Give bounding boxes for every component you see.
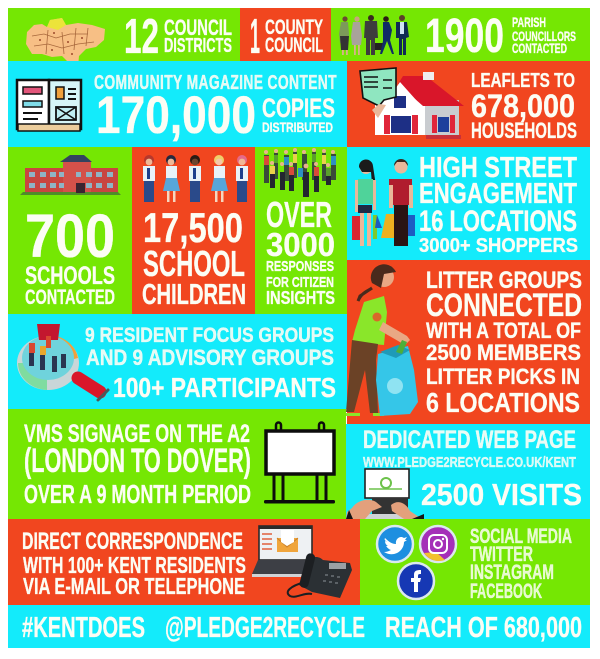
panel: high street (347, 147, 590, 260)
icon: two shoppers (352, 159, 415, 246)
panel: leaflets (347, 61, 590, 147)
label: parish councillors contacted: CONTACTED (512, 40, 567, 56)
text: VMS signage: VMS SIGNAGE ON THE A2 (24, 420, 250, 448)
text: over 3000 responses (266, 194, 335, 308)
panel: council districts (8, 8, 240, 67)
label: county council: COUNCIL (265, 34, 323, 57)
panel: litter groups (346, 260, 590, 424)
text: direct correspondence: VIA E-MAIL OR TELEPHONE (23, 573, 245, 599)
number: 12: 12 (124, 10, 159, 64)
panel: VMS signage (8, 409, 346, 519)
text: focus and advisory groups: 9 RESIDENT FOCUS GROUPS (85, 324, 334, 347)
text: over 3000 responses: INSIGHTS (266, 288, 335, 308)
panel: direct correspondence (8, 519, 360, 605)
panel: footer hashtags and reach (8, 605, 590, 648)
text: social media list: INSTAGRAM (470, 561, 554, 584)
icon: Kent map (26, 18, 105, 67)
text: over 3000 responses: OVER (266, 194, 332, 235)
panel: citizen insights (255, 147, 347, 314)
text: 17,500 school children: SCHOOL (143, 243, 245, 284)
label: copies distributed: COPIES (262, 93, 335, 123)
number: 2500 visits: 2500 VISITS (421, 477, 582, 512)
number: 700: 700 (25, 202, 115, 270)
panel: school children (132, 147, 255, 314)
icon: five school children (143, 155, 248, 202)
label: copies distributed: DISTRIBUTED (262, 119, 333, 135)
panel: schools (8, 147, 132, 314)
icon: woman litter picking (346, 264, 418, 416)
panel: focus groups (8, 314, 347, 409)
text: focus and advisory groups: 100+ PARTICIPANTS (113, 372, 336, 403)
icon: house with leaflet (360, 68, 464, 139)
label: council districts: DISTRICTS (164, 35, 232, 57)
text: direct correspondence: WITH 100+ KENT RESIDENTS (23, 552, 246, 578)
text: 17,500 school children: CHILDREN (142, 279, 246, 311)
text: VMS signage: (LONDON TO DOVER) (24, 442, 251, 480)
icon: facebook (398, 563, 434, 599)
label: county council (265, 16, 323, 57)
icon: crowd of people (264, 148, 336, 197)
text: social media list: TWITTER (470, 543, 533, 566)
text: litter groups connected (426, 267, 582, 418)
label: parish councillors contacted: PARISH (512, 14, 546, 30)
label: schools contacted: SCHOOLS (25, 262, 115, 290)
text: focus and advisory groups: AND 9 ADVISORY GROUPS (86, 345, 334, 370)
text: over 3000 responses: RESPONSES (266, 258, 334, 275)
handle: @PLEDGE2RECYCLE (165, 612, 365, 644)
text: direct correspondence (22, 528, 246, 599)
panel: community magazine (8, 61, 347, 147)
icon: councillors group (339, 15, 409, 55)
text: social media list (470, 525, 572, 603)
text: dedicated web page (363, 426, 576, 471)
icon: school building (20, 155, 121, 195)
text: direct correspondence: DIRECT CORRESPONDENCE (22, 528, 243, 555)
panel: parish councillors (331, 8, 590, 63)
text: VMS signage (24, 420, 251, 509)
hashtag: #KENTDOES (22, 612, 145, 644)
icon: laptop with hands (346, 469, 424, 519)
label: county council: COUNTY (265, 16, 323, 39)
label: parish councillors contacted (512, 14, 576, 56)
label: council districts (164, 15, 232, 57)
icon: instagram (420, 526, 456, 562)
label: copies distributed (262, 93, 335, 135)
number: 170,000: 170,000 (96, 86, 256, 145)
text: leaflets to 678,000 households: 678,000 (471, 88, 575, 124)
text: VMS signage: OVER A 9 MONTH PERIOD (24, 479, 251, 509)
text: social media list: FACEBOOK (470, 580, 542, 603)
icon: open magazine (17, 80, 81, 131)
text: over 3000 responses: FOR CITIZEN (266, 274, 334, 291)
label: council districts: COUNCIL (164, 15, 232, 40)
icon: road sign board (264, 422, 335, 504)
text: 17,500 school children (142, 204, 246, 311)
text: litter groups connected: 2500 MEMBERS (426, 340, 581, 365)
label: schools contacted (25, 262, 115, 309)
text: focus and advisory groups (85, 324, 336, 403)
text: high street engagement: 3000+ SHOPPERS (419, 235, 578, 257)
panel: social media (360, 519, 590, 605)
icon: magnifier with people (17, 324, 108, 400)
icon: laptop with email (252, 526, 312, 577)
text: over 3000 responses: 3000 (266, 226, 335, 263)
label: schools contacted: CONTACTED (25, 286, 115, 309)
heading: community magazine content: COMMUNITY MAGAZINE CONTENT (94, 72, 337, 94)
text: litter groups connected: LITTER PICKS IN (426, 364, 580, 389)
text: high street engagement (419, 152, 578, 257)
text: leaflets to 678,000 households (471, 70, 577, 143)
icon: telephone (288, 553, 352, 598)
text: 17,500 school children: 17,500 (143, 204, 243, 251)
panel: county council (240, 8, 331, 64)
panel: dedicated web page (346, 424, 590, 519)
number: 1900: 1900 (425, 10, 504, 63)
panel: county council: 1 (250, 10, 260, 64)
icon: twitter (377, 526, 413, 562)
